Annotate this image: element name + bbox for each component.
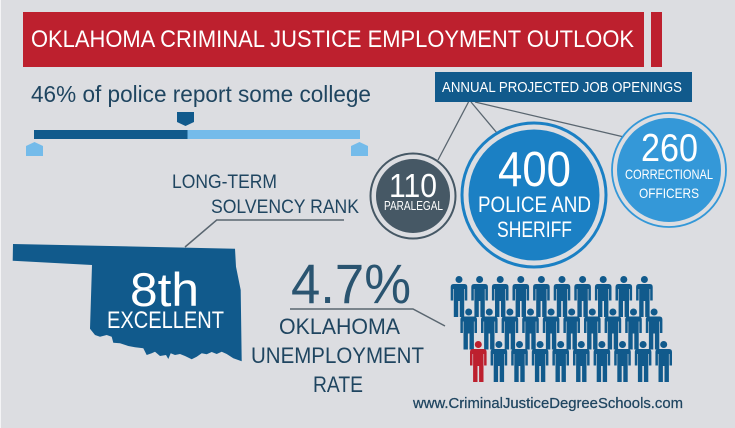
circle: correctional officers: 260 <box>641 127 698 170</box>
unemployment rate value: 4.7% <box>291 252 411 315</box>
circle: correctional officers <box>612 113 726 227</box>
solvency rank label: LONG-TERM <box>172 172 277 193</box>
title: OKLAHOMA CRIMINAL JUSTICE EMPLOYMENT OUTLOOK <box>31 26 634 53</box>
circle: police and sheriff: 400 <box>498 143 571 197</box>
circle: paralegal: PARALEGAL <box>384 199 443 213</box>
circle: correctional officers: CORRECTIONAL <box>625 166 713 182</box>
job openings heading: ANNUAL PROJECTED JOB OPENINGS <box>442 80 682 96</box>
circle: paralegal <box>370 154 456 238</box>
circle: paralegal: 110 <box>389 167 437 204</box>
circle: police and sheriff <box>462 123 606 267</box>
job openings connector lines <box>438 102 624 160</box>
job openings heading <box>435 72 692 102</box>
Oklahoma map with rank: 8th <box>130 263 199 316</box>
progress bar <box>26 112 368 156</box>
college heading: 46% of police report some college <box>31 81 371 107</box>
unemployment label: OKLAHOMA <box>279 314 400 339</box>
title banner <box>23 12 662 67</box>
solvency rank label <box>172 172 359 247</box>
unemployment statistic: UNEMPLOYMENT <box>251 343 424 368</box>
circle: correctional officers: OFFICERS <box>639 185 699 201</box>
Oklahoma map with rank <box>13 244 242 361</box>
circle: police and sheriff: SHERIFF <box>497 217 572 242</box>
circle: police and sheriff: POLICE AND <box>478 192 591 217</box>
police college statistic <box>26 81 371 156</box>
Oklahoma map with rank: EXCELLENT <box>107 307 224 334</box>
unemployment statistic: RATE <box>313 372 363 397</box>
website url: www.CriminalJusticeDegreeSchools.com <box>412 396 683 412</box>
unemployment statistic <box>251 252 445 397</box>
pictogram of people <box>451 276 672 382</box>
solvency rank label: SOLVENCY RANK <box>211 197 359 218</box>
